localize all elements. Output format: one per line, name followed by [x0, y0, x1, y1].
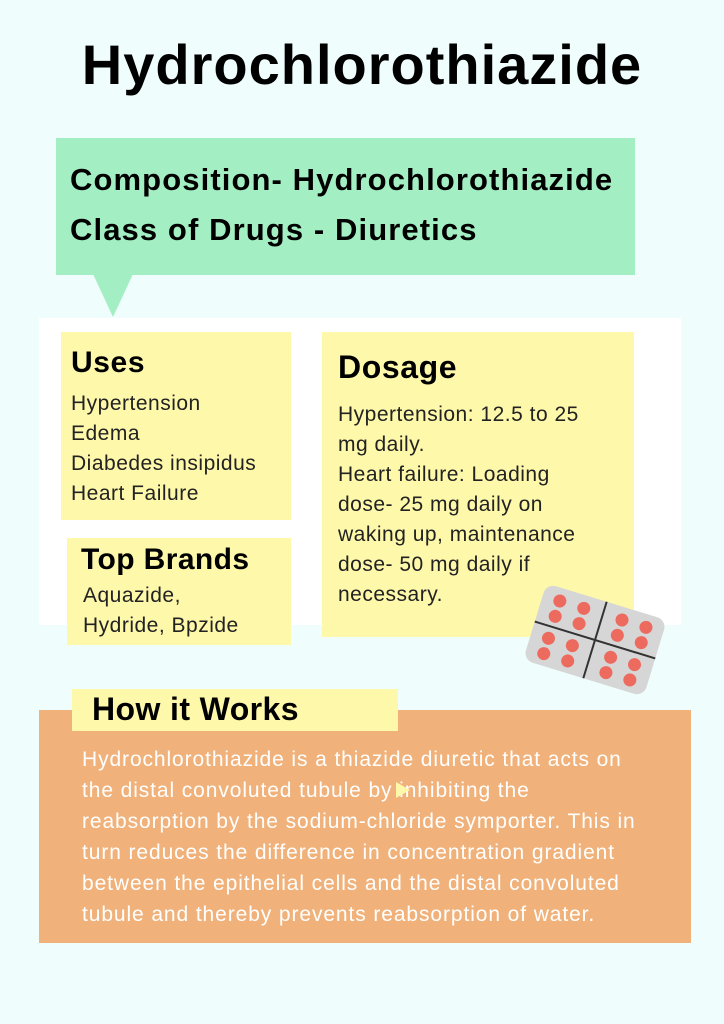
brands list: Hydride, Bpzide	[83, 614, 239, 637]
composition text: Composition- Hydrochlorothiazide	[70, 162, 613, 197]
dosage text: necessary.	[338, 583, 443, 606]
how it works text: reabsorption by the sodium-chloride symporter. This in	[82, 810, 636, 833]
uses list: Heart Failure	[71, 482, 199, 505]
how it works text: Hydrochlorothiazide is a thiazide diuretic that acts on	[82, 748, 622, 771]
brands heading: Top Brands	[81, 543, 249, 576]
dosage text: mg daily.	[338, 433, 425, 456]
panel: how it works	[39, 710, 691, 943]
dosage text: dose- 50 mg daily if	[338, 553, 530, 576]
how it works text: tubule and thereby prevents reabsorption of water.	[82, 903, 595, 926]
uses list	[71, 392, 256, 505]
panel: composition	[56, 138, 635, 275]
panel: dosage	[322, 332, 634, 637]
brands list	[83, 584, 239, 637]
uses list: Hypertension	[71, 392, 201, 415]
callout pointer	[93, 274, 133, 317]
panel: uses	[61, 332, 291, 520]
panel: top brands	[67, 538, 291, 645]
dosage text: waking up, maintenance	[338, 523, 575, 546]
icon: small arrow	[396, 782, 410, 798]
dosage text: dose- 25 mg daily on	[338, 493, 543, 516]
title: Hydrochlorothiazide	[82, 33, 642, 96]
uses heading: Uses	[71, 346, 145, 379]
dosage text	[338, 403, 579, 606]
dosage text: Heart failure: Loading	[338, 463, 550, 486]
how it works text: the distal convoluted tubule by inhibiting the	[82, 779, 530, 802]
icon: pill blister pack	[526, 586, 664, 694]
how it works heading	[72, 689, 398, 731]
how it works text: between the epithelial cells and the distal convoluted	[82, 872, 620, 895]
uses list: Diabedes insipidus	[71, 452, 256, 475]
dosage heading: Dosage	[338, 349, 457, 385]
uses list: Edema	[71, 422, 140, 445]
how it works text: turn reduces the difference in concentration gradient	[82, 841, 615, 864]
panel: white background	[39, 318, 681, 625]
how it works text	[82, 748, 636, 926]
brands list: Aquazide,	[83, 584, 181, 607]
how it works heading: How it Works	[92, 691, 299, 727]
composition text	[70, 162, 613, 247]
dosage text: Hypertension: 12.5 to 25	[338, 403, 579, 426]
composition text: Class of Drugs - Diuretics	[70, 212, 478, 247]
